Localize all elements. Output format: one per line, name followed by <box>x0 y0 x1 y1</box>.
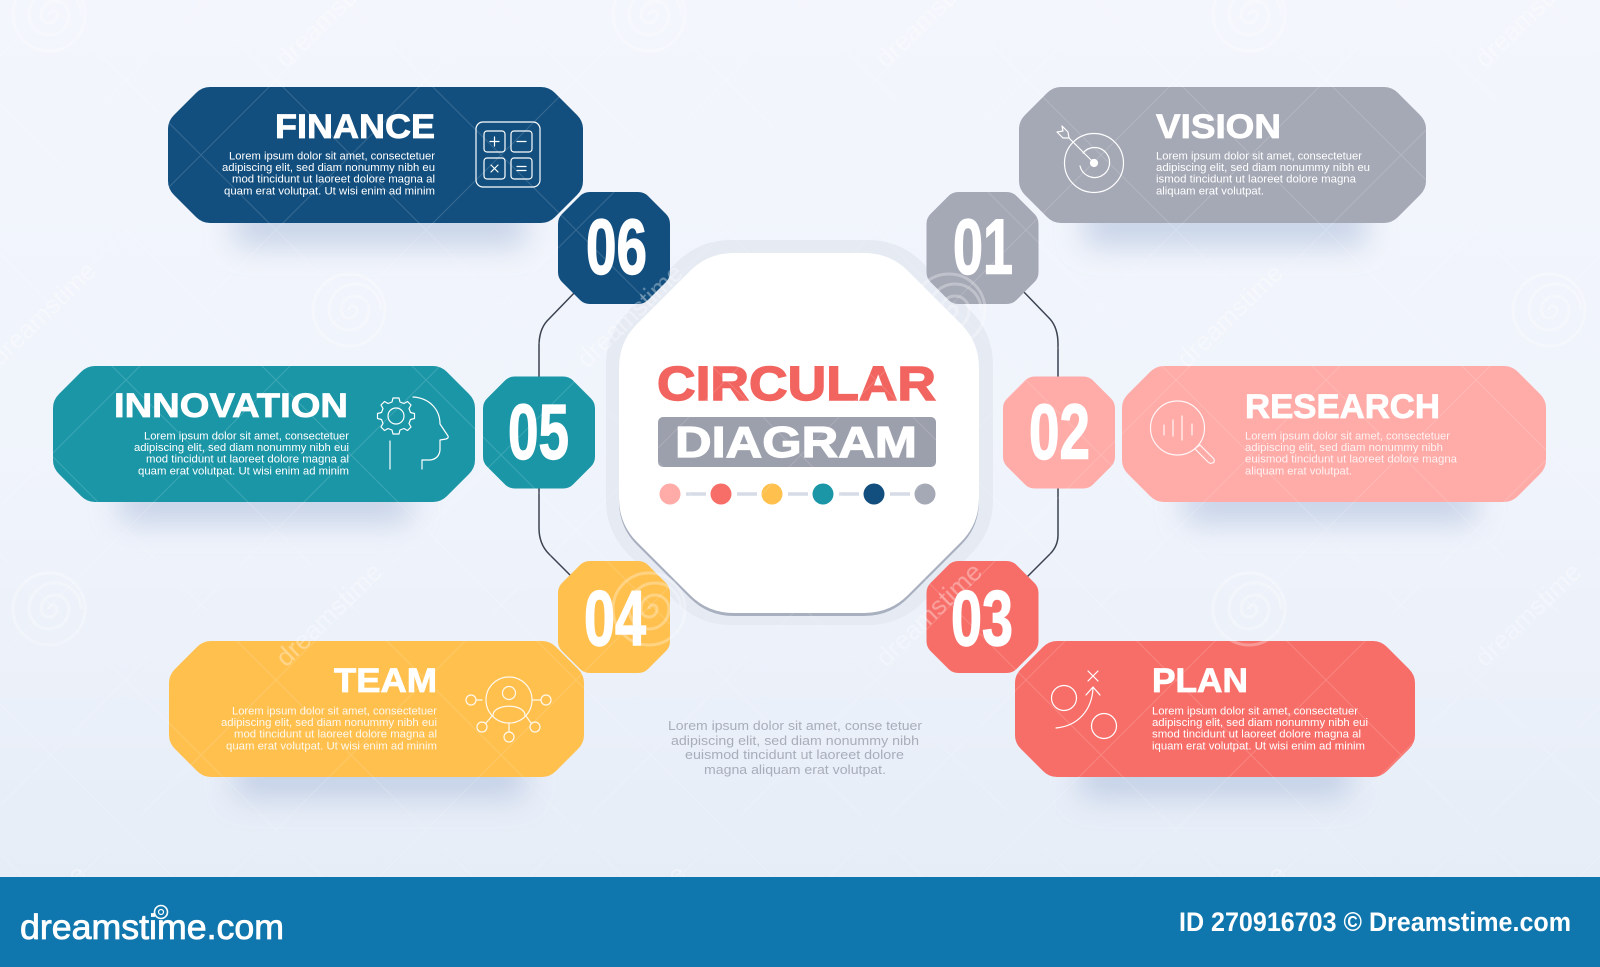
text: plan body <box>1152 706 1368 752</box>
text: innovation body: adipiscing elit, sed diam nonummy nibh eui <box>134 442 349 454</box>
watermark text: dreamstime <box>570 257 689 373</box>
text: plan body: smod tincidunt ut laoreet dolore magna al <box>1152 728 1361 740</box>
heading: circular: CIRCULAR <box>657 358 936 411</box>
panel: finance <box>168 87 583 223</box>
footer credit: ID 270916703 © Dreamstime.com <box>1179 907 1571 937</box>
title: vision: VISION <box>1156 108 1281 146</box>
icon: calculator <box>476 122 540 187</box>
connector lines <box>539 289 1058 582</box>
badge 05 <box>483 376 595 488</box>
text: vision body: adipiscing elit, sed diam nonummy nibh eu <box>1156 162 1370 174</box>
watermark text: dreamstime <box>1170 257 1289 373</box>
icon: magnifier chart <box>1150 401 1214 463</box>
footer logo: dreamstime.com <box>20 908 284 947</box>
title: research: RESEARCH <box>1245 388 1440 426</box>
badge 02 <box>1003 376 1115 488</box>
title: innovation: INNOVATION <box>114 387 348 425</box>
badge 03: 03 <box>951 574 1013 662</box>
panel: plan <box>1015 641 1415 777</box>
watermark text: dreamstime <box>1468 556 1587 672</box>
heading: diagram: DIAGRAM <box>675 418 917 467</box>
text: finance body: Lorem ipsum dolor sit amet, consectetuer <box>229 150 435 162</box>
central octagon <box>606 240 993 625</box>
badge 04: 04 <box>584 574 646 662</box>
text: team body: mod tincidunt ut laoreet dolore magna al <box>234 728 437 740</box>
text: vision body <box>1156 150 1370 198</box>
badge 04 <box>558 561 670 673</box>
title: finance: FINANCE <box>275 108 435 146</box>
panel: research <box>1122 366 1546 502</box>
badge 06: 06 <box>586 202 647 290</box>
text: finance body: quam erat volutpat. Ut wisi enim ad minim <box>224 186 435 198</box>
title: team: TEAM <box>334 662 437 700</box>
text: team body: Lorem ipsum dolor sit amet, consectetuer <box>232 706 437 718</box>
footer bar <box>0 877 1600 967</box>
text: innovation body: Lorem ipsum dolor sit amet, consectetuer <box>144 430 349 442</box>
badge 01 <box>926 192 1038 304</box>
caption text <box>668 718 923 777</box>
panel: team <box>169 641 584 777</box>
text: research body: adipiscing elit, sed diam nonummy nibh <box>1245 442 1443 454</box>
text: team body <box>221 706 437 752</box>
watermark spirals <box>13 0 1585 645</box>
panel shadows <box>120 205 1475 798</box>
badge 03 <box>926 561 1038 673</box>
text: research body: aliquam erat volutpat. <box>1245 466 1352 478</box>
panel: vision <box>1019 87 1426 223</box>
panel: innovation <box>53 366 475 502</box>
text: plan body: adipiscing elit, sed diam nonummy nibh eui <box>1152 717 1368 729</box>
icon: head with gear <box>378 397 448 469</box>
watermark text: dreamstime <box>269 556 388 672</box>
colour dots <box>660 484 936 504</box>
text: plan body: iquam erat volutpat. Ut wisi enim ad minim <box>1152 740 1365 752</box>
caption text: magna aliquam erat volutpat. <box>704 762 886 777</box>
icon: team network <box>466 677 551 742</box>
text: finance body: mod tincidunt ut laoreet dolore magna al <box>232 174 435 186</box>
text: team body: quam erat volutpat. Ut wisi enim ad minim <box>226 740 437 752</box>
text: innovation body <box>134 430 349 478</box>
text: vision body: Lorem ipsum dolor sit amet, consectetuer <box>1156 150 1362 162</box>
caption text: euismod tincidunt ut laoreet dolore <box>685 747 904 762</box>
text: research body: euismod tincidunt ut laoreet dolore magna <box>1245 454 1457 466</box>
text: vision body: aliquam erat volutpat. <box>1156 186 1264 198</box>
caption text: adipiscing elit, sed diam nonummy nibh <box>671 733 919 748</box>
text: vision body: ismod tincidunt ut laoreet dolore magna <box>1156 174 1356 186</box>
badge 05: 05 <box>508 388 569 476</box>
badge 06 <box>558 192 670 304</box>
text: team body: adipiscing elit, sed diam nonummy nibh eui <box>221 717 437 729</box>
icon: strategy play <box>1052 671 1116 738</box>
watermark text: dreamstime <box>869 556 988 672</box>
badge 02: 02 <box>1029 388 1090 476</box>
caption text: Lorem ipsum dolor sit amet, conse tetuer <box>668 718 923 733</box>
title: plan: PLAN <box>1152 662 1248 700</box>
text: innovation body: mod tincidunt ut laoreet dolore magna al <box>146 454 349 466</box>
text: finance body <box>222 150 435 198</box>
text: research body: Lorem ipsum dolor sit amet, consectetuer <box>1245 430 1450 442</box>
text: finance body: adipiscing elit, sed diam nonummy nibh eu <box>222 162 435 174</box>
badge 01: 01 <box>953 202 1013 290</box>
icon: target <box>1057 126 1124 192</box>
text: plan body: Lorem ipsum dolor sit amet, consectetuer <box>1152 706 1358 718</box>
text: research body <box>1245 430 1457 478</box>
text: innovation body: quam erat volutpat. Ut wisi enim ad minim <box>138 466 349 478</box>
